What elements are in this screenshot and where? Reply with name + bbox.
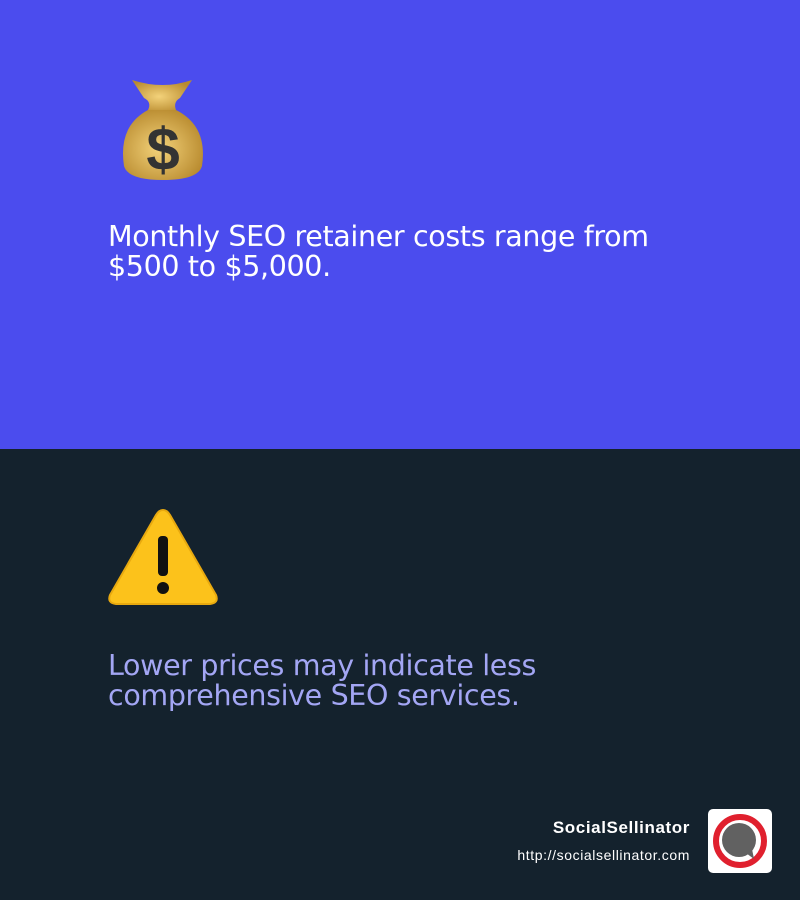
panel: bottom [0,449,800,900]
icon: warning [108,509,218,605]
text: warning: comprehensive SEO services. [108,679,520,712]
text: retainer costs: Monthly SEO retainer costs range from [108,220,649,253]
icon: money bag [123,80,203,183]
text: retainer costs: $500 to $5,000. [108,250,331,283]
brand text: SocialSellinator [553,818,690,837]
brand text [517,818,690,863]
text: retainer costs [108,220,649,283]
logo [708,809,772,873]
icon: money bag: $ [146,116,180,183]
brand text: http://socialsellinator.com [517,847,690,863]
panel: top [0,0,800,449]
text: warning: Lower prices may indicate less [108,649,536,682]
text: warning [108,649,536,712]
